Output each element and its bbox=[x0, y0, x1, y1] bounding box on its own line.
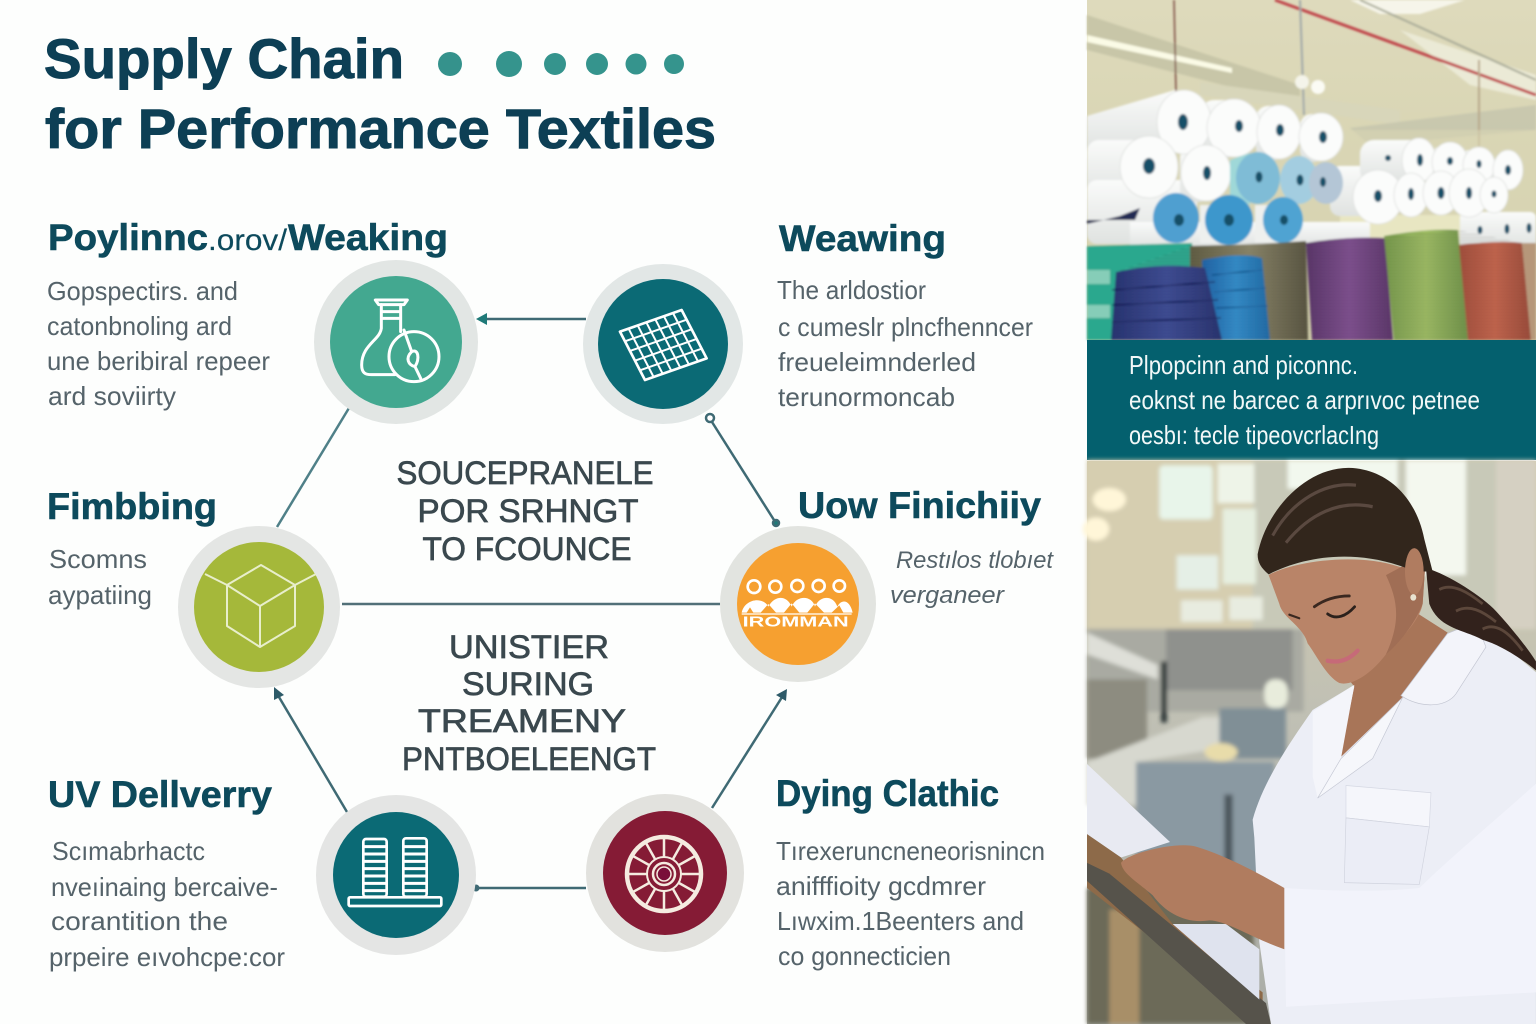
arrow: dyeing to finishing bbox=[712, 689, 787, 808]
heading: polymer: Weaking bbox=[288, 217, 448, 258]
ceiling details bbox=[1350, 0, 1465, 14]
icon: flask bbox=[314, 260, 478, 424]
center text: lower block bbox=[402, 629, 656, 777]
hair bbox=[1258, 468, 1433, 574]
heading: polymer: Poylinnc bbox=[48, 217, 208, 258]
heading: polymer bbox=[48, 217, 448, 258]
center text: upper block bbox=[396, 455, 654, 567]
eye, brow and smile bbox=[1289, 596, 1358, 661]
step: polymer bbox=[47, 217, 478, 424]
body bbox=[1253, 604, 1536, 1024]
caption band: Plpopcinn and piconnc. bbox=[1129, 350, 1358, 380]
text: fimbbing description: aypatiing bbox=[48, 580, 152, 610]
text: polymer description: Gopspectirs. and bbox=[47, 276, 238, 306]
title: Supply Chain bbox=[44, 27, 404, 90]
step: weaving bbox=[583, 218, 1033, 424]
center text: lower block: UNISTIER bbox=[449, 629, 609, 665]
heading: delivery: UV Dellverry bbox=[48, 774, 272, 815]
ear and earring bbox=[1405, 548, 1424, 601]
icon: cube bbox=[178, 526, 340, 688]
blurred factory background bbox=[1083, 460, 1536, 1024]
text: dyeing description: co gonnecticien bbox=[778, 941, 951, 971]
text: weaving description: c cumeslr plncfhenncer bbox=[778, 312, 1033, 342]
icon: people row bbox=[720, 526, 876, 682]
face bbox=[1269, 554, 1426, 684]
title bbox=[44, 27, 716, 160]
icon: woven grid bbox=[583, 264, 743, 424]
text: finishing description: verganeer bbox=[890, 582, 1005, 609]
caption band: eoknst ne barcec a arprıvoc petnee bbox=[1129, 385, 1480, 415]
roll holes bbox=[1143, 114, 1532, 234]
text: dyeing description bbox=[776, 836, 1045, 971]
caption band bbox=[1087, 340, 1536, 460]
arrow: fimbbing to polymer bbox=[277, 408, 349, 527]
center text: upper block: SOUCEPRANELE bbox=[396, 455, 654, 491]
caption band: oesbı: tecle tipeovcrlacIng bbox=[1129, 420, 1379, 450]
step: fimbbing bbox=[47, 486, 340, 688]
white rolls bbox=[1087, 90, 1536, 248]
paper and railing bbox=[1087, 764, 1271, 1024]
title: for Performance Textiles bbox=[45, 97, 716, 160]
text: dyeing description: anifffioity gcdmrer bbox=[776, 871, 986, 901]
text: delivery description: Scımabrhactc bbox=[52, 836, 205, 866]
center text: lower block: PNTBOELEENGT bbox=[402, 741, 656, 777]
text: delivery description bbox=[49, 836, 285, 972]
text: delivery description: corantition the bbox=[51, 906, 228, 936]
text: dyeing description: Tırexeruncneneorisnincn bbox=[776, 836, 1045, 866]
decorative title dots bbox=[438, 51, 684, 77]
text: fimbbing description bbox=[48, 544, 152, 610]
text: polymer description: ard soviirty bbox=[48, 381, 176, 411]
arrow: finishing to weaving bbox=[706, 414, 779, 526]
center text: lower block: SURING bbox=[462, 666, 594, 702]
arrow: delivery to fimbbing bbox=[274, 687, 347, 812]
braid bbox=[1426, 568, 1536, 670]
text: polymer description: catonbnoling ard bbox=[47, 311, 232, 341]
text: dyeing description: Lıwxim.1Beenters and bbox=[777, 906, 1024, 936]
text: weaving description: terunormoncab bbox=[778, 382, 955, 412]
text: weaving description: freueleimnderled bbox=[778, 347, 976, 377]
step: dyeing bbox=[586, 773, 1045, 971]
heading: dyeing: Dying Clathic bbox=[776, 773, 999, 814]
text: delivery description: prpeire eıvohcpe:cor bbox=[49, 942, 285, 972]
photo: textile spools bbox=[1087, 0, 1536, 340]
photo: technician with clipboard bbox=[1083, 460, 1536, 1024]
icon: dye wheel bbox=[586, 794, 744, 952]
blue rolls bbox=[1230, 153, 1250, 205]
arrow: fimbbing to finishing bbox=[342, 603, 720, 605]
center text: lower block: TREAMENY bbox=[418, 703, 626, 739]
step: finishing bbox=[720, 485, 1054, 682]
step: delivery bbox=[48, 774, 476, 972]
arrow: dyeing to delivery bbox=[472, 884, 586, 892]
text: fimbbing description: Scomns bbox=[49, 544, 147, 574]
heading: fimbbing: Fimbbing bbox=[47, 486, 217, 527]
heading: weaving: Weawing bbox=[779, 218, 946, 259]
hand bbox=[1121, 845, 1284, 949]
text: finishing description bbox=[890, 547, 1054, 609]
text: polymer description bbox=[47, 276, 270, 411]
heading: polymer: .orov/ bbox=[208, 224, 288, 257]
center text: upper block: POR SRHNGT bbox=[418, 493, 638, 529]
text: delivery description: nveıinaing bercaive- bbox=[51, 872, 278, 902]
heading: finishing: Uow Finichiiy bbox=[798, 485, 1041, 526]
page background bbox=[0, 0, 1087, 1024]
text: weaving description bbox=[777, 275, 1033, 412]
icon: textile columns bbox=[316, 795, 476, 955]
center text: upper block: TO FCOUNCE bbox=[422, 531, 632, 567]
text: polymer description: une beribiral repeer bbox=[47, 346, 270, 376]
arrow: weaving to polymer bbox=[476, 313, 586, 325]
text: weaving description: The arldostior bbox=[777, 275, 926, 305]
icon: people row: IROMMAN bbox=[743, 615, 849, 631]
text: finishing description: Restılos tlobıet bbox=[896, 547, 1054, 574]
coloured thread cones bbox=[1087, 243, 1200, 340]
connecting arrows of the cycle bbox=[274, 313, 787, 892]
